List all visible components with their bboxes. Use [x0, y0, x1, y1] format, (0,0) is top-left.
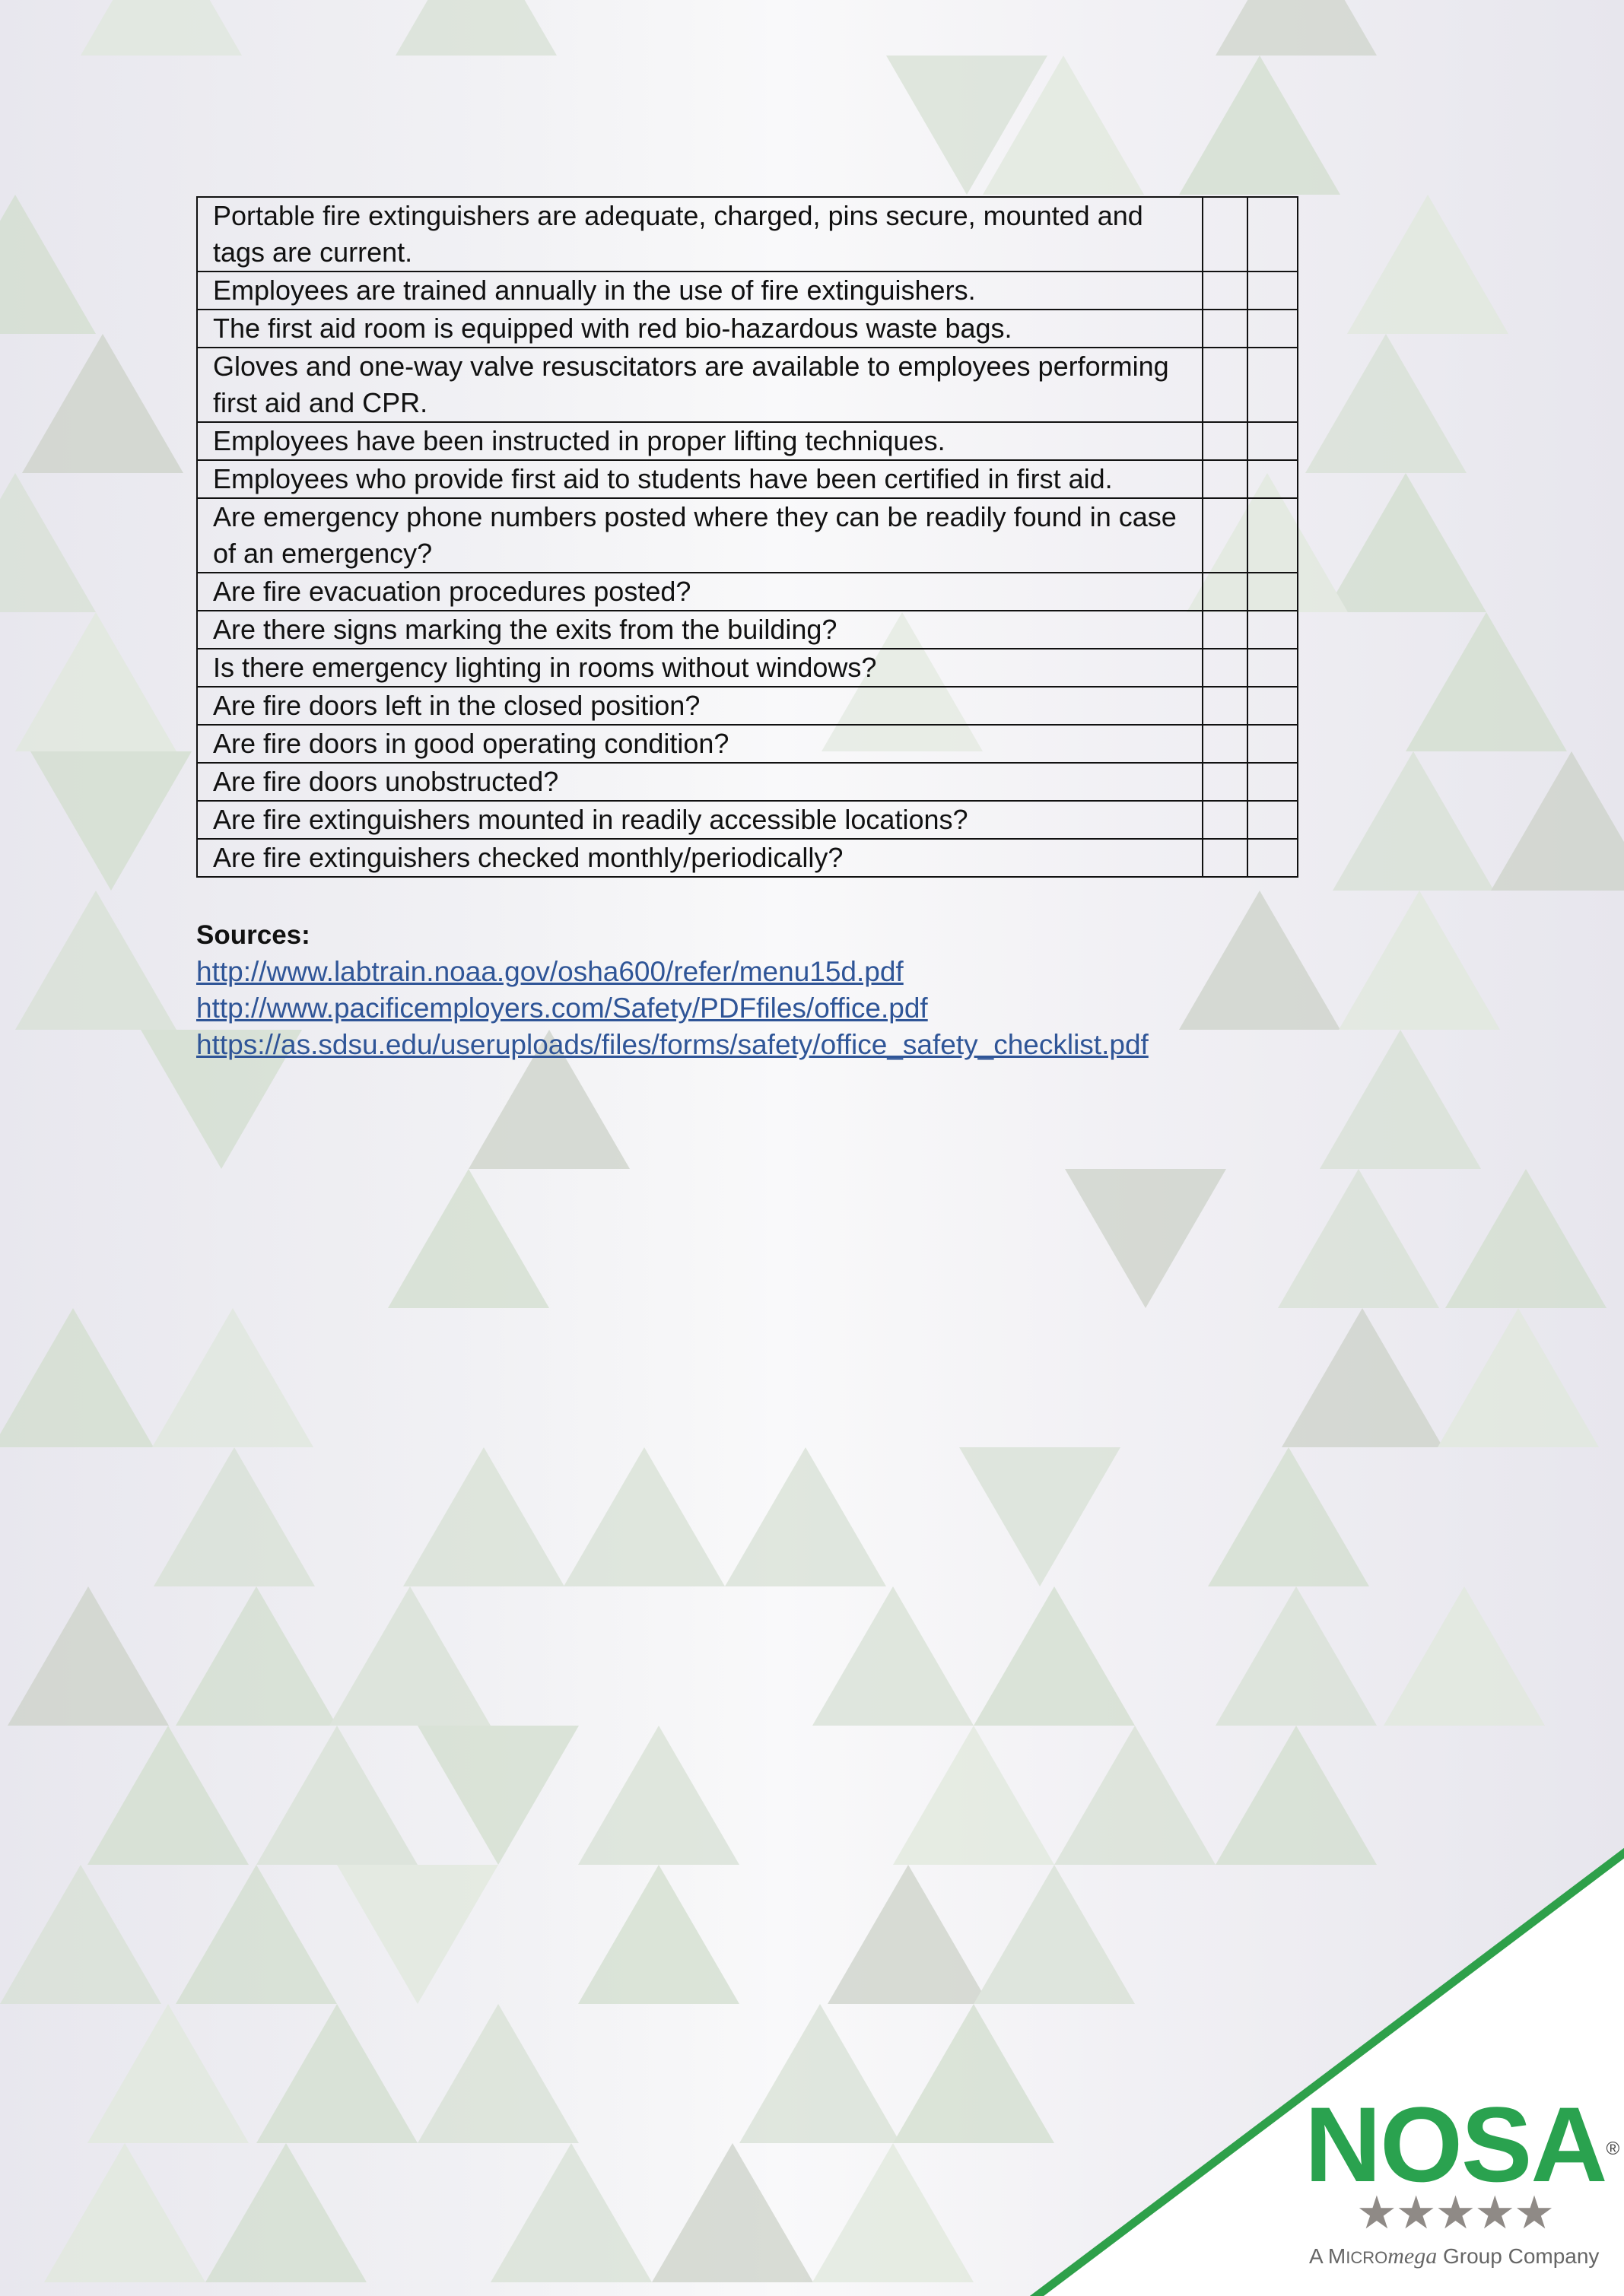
checklist table: Employees are trained annually in the use of fire extinguishers. — [213, 275, 976, 306]
checklist table: Are fire extinguishers mounted in readily accessible locations? — [213, 804, 968, 835]
sources block: Sources: — [196, 920, 310, 950]
checklist table: Are fire doors in good operating condition? — [213, 728, 729, 759]
checklist table: Are fire extinguishers checked monthly/periodically? — [213, 842, 843, 873]
checklist table: Are fire doors unobstructed? — [213, 766, 558, 797]
sources block: http://www.labtrain.noaa.gov/osha600/refer/menu15d.pdf — [196, 956, 904, 987]
checklist table: Are emergency phone numbers posted where they can be readily found in case — [213, 501, 1177, 532]
checklist table: Are fire evacuation procedures posted? — [213, 576, 691, 607]
checklist table: Employees who provide first aid to students have been certified in first aid. — [213, 463, 1113, 494]
checklist table — [196, 196, 1298, 878]
checklist table: Are there signs marking the exits from the building? — [213, 614, 837, 645]
sources block: http://www.pacificemployers.com/Safety/PDFfiles/office.pdf — [196, 992, 928, 1024]
logo stars: ★★★★★ — [1356, 2187, 1553, 2238]
checklist table: Employees have been instructed in proper lifting techniques. — [213, 425, 945, 456]
sources block — [196, 920, 1149, 1060]
logo: NOSA — [1305, 2085, 1619, 2269]
checklist table: Portable fire extinguishers are adequate, charged, pins secure, mounted and — [213, 200, 1143, 231]
checklist table: of an emergency? — [213, 538, 432, 569]
checklist table: The first aid room is equipped with red bio-hazardous waste bags. — [213, 313, 1012, 344]
checklist table: Are fire doors left in the closed position? — [213, 690, 700, 721]
checklist table: Is there emergency lighting in rooms without windows? — [213, 652, 876, 683]
logo wordmark: NOSA® — [1305, 2085, 1618, 2204]
checklist table: Gloves and one-way valve resuscitators are available to employees performing — [213, 351, 1169, 382]
logo tagline: A MICROmega Group Company — [1309, 2244, 1599, 2269]
checklist table: first aid and CPR. — [213, 387, 427, 418]
checklist table: tags are current. — [213, 237, 412, 268]
sources block: https://as.sdsu.edu/useruploads/files/forms/safety/office_safety_checklist.pdf — [196, 1029, 1149, 1060]
